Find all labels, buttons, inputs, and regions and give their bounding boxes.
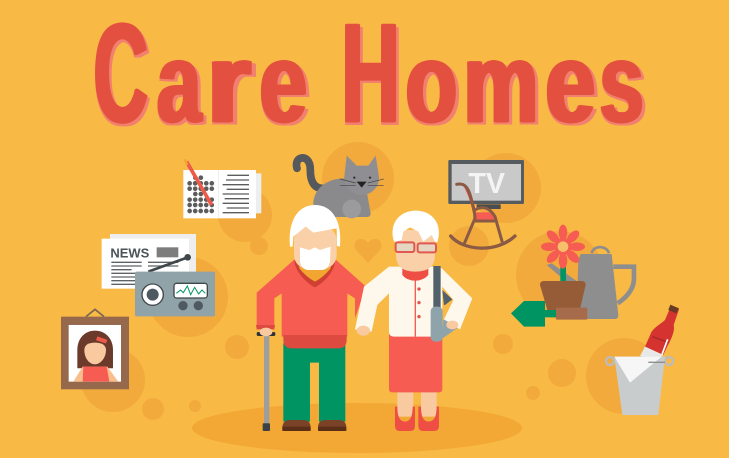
man's legs <box>283 343 345 422</box>
heart <box>354 239 382 263</box>
old woman figure <box>355 211 472 431</box>
woman's bag and strap <box>431 266 443 342</box>
title: e <box>260 18 307 146</box>
woman's bag back <box>442 290 452 305</box>
icon: television <box>448 160 524 209</box>
ground shadow <box>192 403 522 453</box>
icon: garden trowel <box>511 301 587 327</box>
man's head <box>290 205 340 270</box>
icon: wine bottle in bucket <box>606 305 679 415</box>
old man figure <box>256 205 366 431</box>
title: m <box>464 18 538 146</box>
title: e <box>545 18 595 146</box>
man's shoes <box>282 420 346 431</box>
icon: crossword and pen <box>183 159 261 218</box>
woman's skirt <box>389 334 442 392</box>
newspaper headline: NEWS <box>110 245 150 260</box>
TV label: TV <box>468 168 505 200</box>
title: s <box>600 18 644 146</box>
woman's head <box>393 211 439 281</box>
icon: framed portrait <box>61 309 129 389</box>
man's sweater <box>256 259 366 348</box>
cane <box>257 332 275 431</box>
woman's jacket <box>355 267 472 337</box>
background blobs <box>81 142 662 420</box>
title <box>94 0 646 153</box>
woman's legs <box>397 390 437 417</box>
title: o <box>406 18 457 146</box>
icon: cat <box>296 156 384 218</box>
icon: watering can <box>547 247 634 319</box>
title: r <box>207 18 251 146</box>
icon: rocking chair <box>451 184 515 248</box>
title: a <box>157 18 201 146</box>
icon: newspaper <box>102 234 196 289</box>
woman's shoes <box>395 407 439 431</box>
icon: radio <box>135 254 215 316</box>
icon: flower pot <box>540 225 586 313</box>
